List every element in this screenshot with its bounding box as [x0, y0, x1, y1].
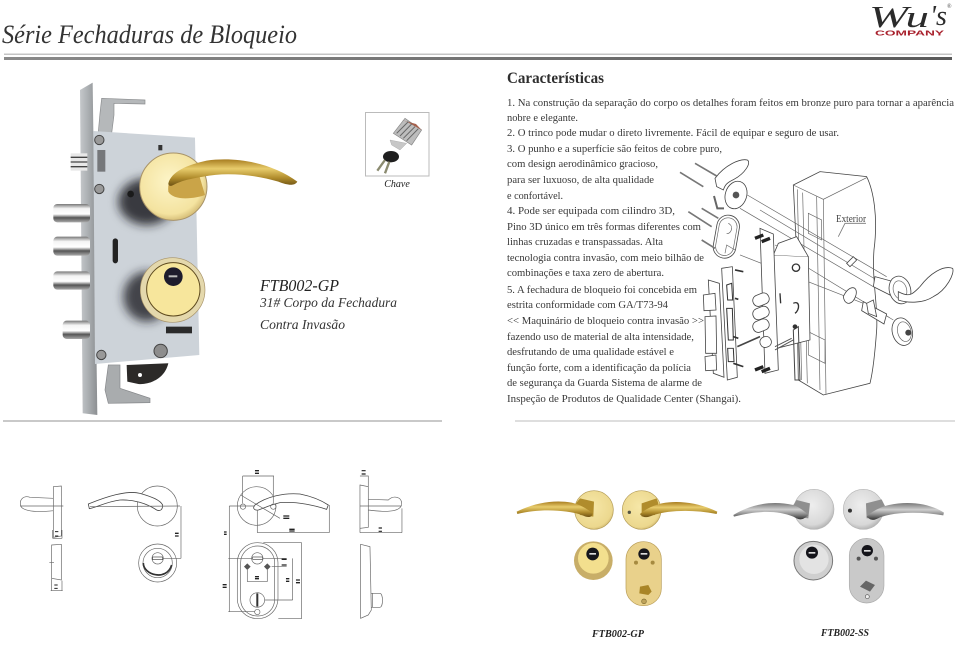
- features text: 3. O punho e a superfície são feitos de cobre puro,: [507, 143, 722, 155]
- key caption: Chave: [384, 179, 410, 190]
- features text: Inspeção de Produtos de Qualidade Center (Shangai).: [507, 393, 741, 405]
- lock case: [755, 228, 810, 380]
- right divider: [515, 420, 955, 422]
- features text: de segurança da Guarda Sistema de alarme de: [507, 377, 702, 389]
- photo: mortise lock with gold handle: [53, 83, 297, 415]
- round cylinder view: [139, 544, 177, 582]
- features text: 2. O trinco pode mudar o direto livremente. Fácil de equipar e seguro de usar.: [507, 127, 839, 139]
- product name block: [259, 276, 397, 332]
- silver cylinder rosette: [794, 541, 833, 580]
- logo: Wu's Company: 's: [930, 1, 947, 32]
- features text: Pino 3D único em três formas diferentes com: [507, 221, 701, 233]
- latch: [71, 153, 87, 171]
- cylinder: [862, 300, 916, 348]
- product photos: [517, 489, 944, 606]
- side view lower right: [361, 544, 382, 618]
- key card: [366, 112, 429, 190]
- front lever and rosette: [873, 268, 953, 306]
- side view upper left: [20, 486, 63, 538]
- faceplate: [80, 83, 97, 415]
- exploded assembly diagram: [680, 160, 953, 395]
- gold rosettes and levers: [517, 491, 717, 529]
- product code: FTB002-GP: [259, 276, 339, 295]
- gold rosette: [140, 153, 207, 220]
- oval backplate: [688, 208, 741, 260]
- features text: estrita conformidade com GA/T73-94: [507, 299, 668, 311]
- features text: 4. Pode ser equipada com cilindro 3D,: [507, 205, 675, 217]
- top bracket: [98, 98, 145, 133]
- silver backplate: [849, 538, 884, 603]
- features text: para ser luxuoso, de alta qualidade: [507, 174, 654, 186]
- technical drawing: [20, 471, 402, 619]
- oval plate view: [223, 543, 302, 619]
- strike plates: [703, 267, 743, 380]
- product subtitle line 2: Contra Invasão: [260, 317, 345, 332]
- silver rosettes and levers: [733, 489, 944, 529]
- features text: tecnologia contra invasão, com meio bilhão de: [507, 252, 704, 264]
- features text: fazendo uso de material de alta intensidade,: [507, 331, 694, 343]
- gold cylinder rosette: [574, 541, 613, 580]
- features text: << Maquinário de bloqueio contra invasão >>: [507, 315, 704, 327]
- front lever view: [88, 486, 181, 558]
- silver set: [733, 489, 944, 603]
- gold lever: [168, 159, 297, 198]
- features text: função forte, com a identificação da polícia: [507, 362, 691, 374]
- left divider: [3, 420, 442, 422]
- cam: [127, 363, 168, 384]
- dimensioned lever view: [224, 471, 329, 612]
- product subtitle line 1: 31# Corpo da Fechadura: [259, 295, 397, 310]
- side view right: [360, 471, 402, 533]
- bottom bracket: [105, 365, 150, 403]
- features text: com design aerodinâmico gracioso,: [507, 158, 658, 170]
- logo: Wu's Company: ®: [947, 3, 952, 10]
- logo: Wu's Company: COMPANY: [875, 30, 945, 38]
- title: Série Fechaduras de Bloqueio: [2, 19, 297, 49]
- lock bolts: [737, 291, 773, 349]
- features text: linhas cruzadas e transpassadas. Alta: [507, 236, 663, 248]
- logo: Wu's Company: Wu: [869, 0, 929, 34]
- front holes: [843, 257, 857, 303]
- features text: [507, 97, 954, 405]
- features text: desfrutando de uma qualidade estável e: [507, 346, 674, 358]
- features heading: Características: [507, 70, 604, 87]
- caption: satin model: FTB002-SS: [820, 628, 869, 639]
- features text: 1. Na construção da separação do corpo os detalhes foram feitos em bronze puro para tornar a aparência: [507, 97, 954, 109]
- lock body: [93, 131, 199, 364]
- side view lower left: [49, 544, 63, 591]
- gold set: [517, 491, 717, 606]
- exterior label: Exterior: [836, 214, 867, 225]
- logo: Wu's Company: [869, 0, 952, 38]
- header rule: [4, 54, 952, 60]
- gold cylinder: [140, 258, 205, 322]
- bolts: [53, 204, 90, 339]
- features text: 5. A fechadura de bloqueio foi concebida em: [507, 284, 697, 296]
- back lever and rosette: [680, 160, 750, 212]
- features text: e confortável.: [507, 190, 563, 202]
- door edge: [793, 172, 877, 395]
- gold backplate: [626, 542, 661, 606]
- features text: combinações e taxa zero de abertura.: [507, 267, 664, 279]
- spindles: [740, 195, 893, 320]
- body screws and slots: [95, 135, 192, 377]
- caption: gold model: FTB002-GP: [591, 629, 645, 640]
- features text: nobre e elegante.: [507, 112, 578, 124]
- body shadows: [118, 178, 175, 322]
- icon: keys and cylinder pins: [377, 118, 422, 173]
